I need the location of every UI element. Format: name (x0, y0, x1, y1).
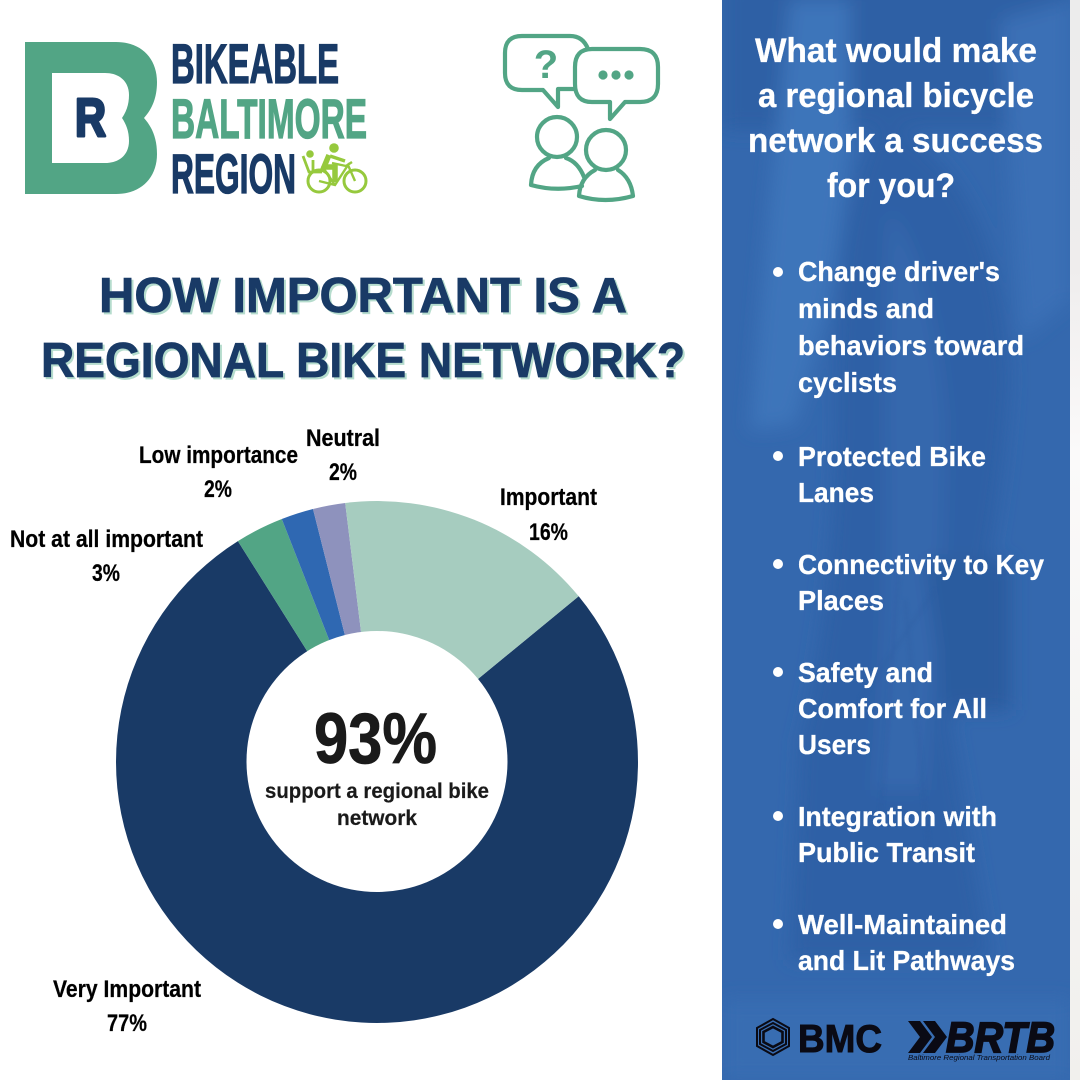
bullet: Change driver's minds: Change driver's (798, 256, 1000, 287)
slice: Not at all important 3% (238, 519, 377, 762)
BRTB wordmark: BRTB (946, 1014, 1055, 1062)
title text: HOW IMPORTANT IS A (99, 268, 627, 323)
title shadow: HOW IMPORTANT IS A (101, 270, 629, 325)
BRTB full name: Baltimore Regional Transportation Board (908, 1053, 1051, 1062)
title text (41, 268, 685, 388)
bullet: Connectivity to Key Places (773, 549, 1044, 616)
icon: question speech bubble (505, 36, 588, 107)
logo: Bikeable Baltimore Region (25, 32, 367, 205)
label: Not at all important 3% (10, 526, 203, 587)
label: Important 16%: 16% (529, 519, 568, 546)
title shadow: REGIONAL BIKE NETWORK? (43, 335, 687, 390)
label: Important 16% (500, 484, 597, 546)
label: Low importance 2%: Low importance (139, 442, 298, 469)
logo wordmark: Baltimore: BALTIMORE (171, 87, 367, 150)
logo wordmark: Region: REGION (171, 142, 296, 205)
icon: right person (579, 130, 633, 200)
icon: ellipsis dots (598, 70, 634, 80)
bullet: Change driver's minds: minds and (798, 293, 934, 324)
label: Not at all important 3%: 3% (92, 560, 120, 587)
icon: ellipsis speech bubble (575, 49, 658, 119)
bullet: Change driver's minds (773, 256, 1024, 398)
BMC wordmark: BMC (798, 1018, 882, 1061)
bullet: Safety and Comfort: Safety and (798, 657, 933, 688)
panel: success factors (722, 0, 1070, 1080)
title (41, 268, 687, 390)
label: Very Important 77%: 77% (107, 1010, 147, 1037)
center caption: support a regional bike (265, 780, 489, 803)
logo wordmark: Bikeable: BIKEABLE (171, 32, 339, 95)
bullet: Protected Bike Lanes: Protected Bike (798, 441, 986, 472)
logo: BRTB (908, 1014, 1055, 1062)
bullet: Protected Bike Lanes (773, 441, 986, 508)
bullet: Well-Maintained and Lit Pathways: and Lit Pathways (798, 945, 1015, 976)
label: Not at all important 3%: Not at all important (10, 526, 203, 553)
title text: REGIONAL BIKE NETWORK? (41, 333, 685, 388)
center stat: 93%: 93% (314, 700, 437, 779)
center caption: network (337, 807, 417, 830)
logo: BMC (757, 1018, 882, 1061)
icon: BMC hexagon (757, 1019, 789, 1055)
label: Very Important 77%: Very Important (53, 976, 201, 1003)
label: Neutral 2% (306, 425, 380, 486)
bullet: Change driver's minds: cyclists (798, 367, 897, 398)
bullet: Well-Maintained and Lit Pathways (773, 909, 1015, 976)
slice: Low importance 2% (282, 509, 377, 762)
icon: family on bike (303, 143, 366, 192)
bullet: Safety and Comfort: Users (798, 729, 871, 760)
icon: double chevron (908, 1021, 947, 1053)
panel heading: for you? (827, 167, 955, 205)
bullet: Integration with Public Transit: Integration with (798, 801, 997, 832)
icon: two people in conversation (505, 36, 658, 200)
bullet: Change driver's minds: behaviors toward (798, 330, 1024, 361)
slice: Very Important 77% (116, 541, 638, 1023)
logo mark: letter B (25, 42, 157, 194)
bullet: Well-Maintained and Lit Pathways: Well-Maintained (798, 909, 1007, 940)
label: Low importance 2% (139, 442, 298, 503)
bullet: Safety and Comfort: Comfort for All (798, 693, 987, 724)
bullet: Connectivity to Key Places: Connectivity to Key (798, 549, 1044, 580)
donut chart (116, 501, 638, 1023)
label: Neutral 2%: 2% (329, 459, 357, 486)
label: Neutral 2%: Neutral (306, 425, 380, 452)
slice: Neutral 2% (313, 503, 377, 762)
label: Important 16%: Important (500, 484, 597, 511)
bullet: Integration with Public Transit: Public Transit (798, 837, 975, 868)
icon: left person (531, 117, 584, 189)
donut hole (246, 631, 508, 892)
panel heading: network a success (748, 122, 1043, 160)
label: Low importance 2%: 2% (204, 476, 232, 503)
center caption (265, 780, 489, 830)
panel background (722, 0, 1070, 1080)
logo mark: letter R: R (75, 88, 106, 148)
label: Very Important 77% (53, 976, 201, 1037)
icon: question mark: ? (534, 43, 558, 87)
panel heading: a regional bicycle (758, 77, 1034, 115)
slice: Important 16% (345, 501, 579, 762)
bullet: Integration with Public Transit (773, 801, 997, 868)
bullet: Safety and Comfort (773, 657, 987, 760)
title shadow (43, 270, 687, 390)
bullet: Connectivity to Key Places: Places (798, 585, 884, 616)
panel heading: What would make (755, 32, 1037, 70)
panel heading (748, 32, 1043, 205)
bullet: Protected Bike Lanes: Lanes (798, 477, 874, 508)
